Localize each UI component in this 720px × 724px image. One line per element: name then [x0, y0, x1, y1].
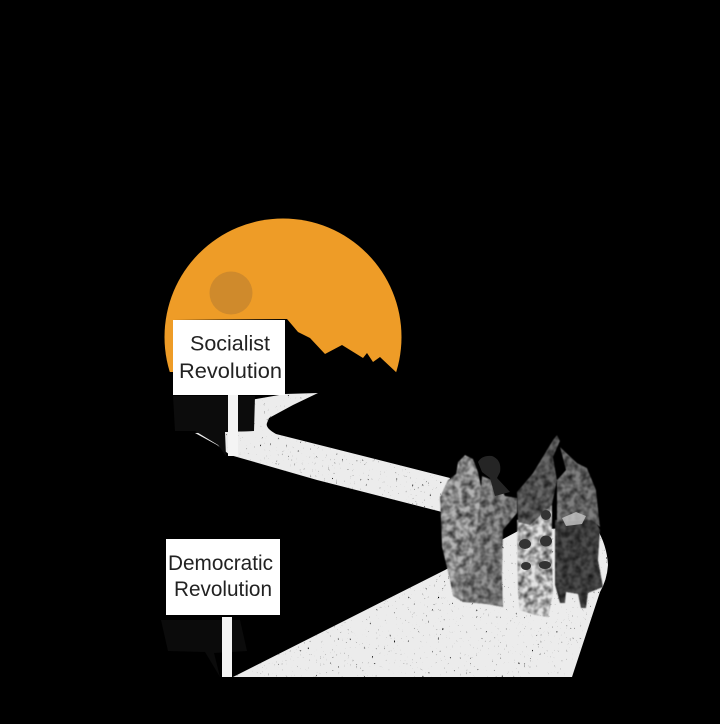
woman one: [440, 455, 486, 602]
woman three lower dress: [517, 505, 553, 617]
dark hair and top: [478, 456, 510, 496]
upper road: [195, 393, 450, 512]
sign post: democratic: [222, 617, 232, 677]
woman three upper body and raised arm: [517, 435, 560, 525]
sign shadow: democratic: [161, 620, 247, 677]
woman four skirt: [555, 515, 603, 608]
dress polka dots: [519, 510, 552, 570]
lower road: [233, 527, 608, 677]
sun with mountain silhouette: [160, 218, 410, 470]
sign text: socialist: Socialist: [190, 332, 270, 356]
sign text: democratic: Democratic: [168, 552, 273, 575]
sign shadow: socialist: [173, 396, 255, 456]
woman two: [462, 476, 517, 607]
mountain silhouette: [160, 319, 410, 470]
sign: democratic revolution: [166, 539, 280, 615]
sign: socialist revolution: [173, 320, 285, 395]
sign text: revolution: Revolution: [174, 578, 272, 601]
small inner sun: [210, 272, 252, 314]
sign text: revolution: Revolution: [179, 360, 282, 383]
woman four upper body and raised arm: [557, 447, 600, 527]
sign post: socialist: [228, 395, 238, 456]
blouse accents: [562, 512, 586, 526]
group of women walking: [440, 435, 603, 617]
